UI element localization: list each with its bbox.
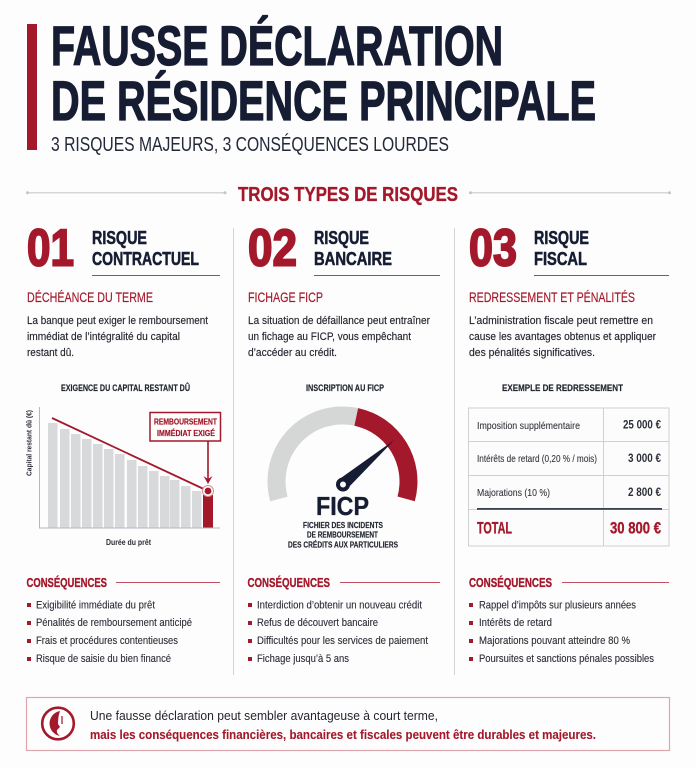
callout text (90, 708, 596, 742)
consequences: Risque de saisie du bien financé (36, 653, 171, 665)
FICP definition: DE REMBOURSEMENT (307, 530, 378, 540)
description: La banque peut exiger le remboursement (27, 315, 208, 327)
description: immédiat de l’intégralité du capital (27, 331, 180, 343)
consequences (26, 575, 220, 665)
consequences: Difficultés pour les services de paiement (257, 635, 428, 647)
heading (534, 227, 669, 276)
column dividers (233, 228, 234, 675)
consequences: Fichage jusqu’à 5 ans (257, 653, 349, 665)
description: La situation de défaillance peut entraîner (248, 315, 430, 327)
description: restant dû. (27, 347, 74, 359)
table: 3 000 € (628, 451, 661, 465)
panel: risque contractuel (24, 220, 220, 665)
FICP label: FICP (316, 493, 369, 521)
table (468, 408, 669, 546)
trend line (52, 418, 208, 491)
description: cause les avantages obtenus et appliquer (469, 331, 656, 343)
consequences: Interdiction d’obtenir un nouveau crédit (257, 600, 422, 612)
header block (27, 14, 596, 156)
table total: TOTAL (477, 520, 512, 538)
number 01: 01 (27, 220, 74, 278)
callout: IMMÉDIAT EXIGÉ (157, 428, 215, 438)
gauge chart (268, 406, 417, 550)
table: 30 800 € (610, 520, 661, 538)
callout: footer warning (26, 698, 670, 750)
description (248, 315, 430, 359)
panel: risque bancaire (248, 220, 440, 665)
title: FAUSSE DÉCLARATION (51, 14, 503, 77)
bar chart: Durée du prêt (106, 538, 151, 547)
subheading: DÉCHÉANCE DU TERME (27, 289, 153, 305)
subheading: FICHAGE FICP (248, 289, 323, 305)
description: d’accéder au crédit. (248, 347, 337, 359)
table: 2 800 € (628, 485, 661, 499)
consequences: CONSÉQUENCES (26, 575, 107, 590)
chart title: INSCRIPTION AU FICP (306, 383, 384, 393)
heading: BANCAIRE (314, 248, 392, 269)
number 03: 03 (469, 220, 517, 278)
heading: RISQUE (314, 227, 369, 248)
description: des pénalités significatives. (469, 347, 595, 359)
section heading (26, 184, 671, 206)
heading: RISQUE (92, 227, 147, 248)
FICP definition: DES CRÉDITS AUX PARTICULIERS (288, 540, 399, 550)
consequences: CONSÉQUENCES (469, 575, 552, 590)
panel: risque fiscal (468, 220, 669, 665)
arrow (204, 441, 212, 484)
consequences (248, 575, 440, 665)
consequences: Intérêts de retard (479, 617, 552, 629)
description: un fichage au FICP, vous empêchant (248, 331, 411, 343)
heading: RISQUE (534, 227, 589, 248)
table rows: Imposition supplémentaire (477, 420, 580, 432)
consequences: CONSÉQUENCES (248, 575, 330, 590)
consequences: Frais et procédures contentieuses (36, 635, 178, 647)
consequences (469, 575, 669, 665)
table: Intérêts de retard (0,20 % / mois) (477, 453, 597, 465)
consequences: Refus de découvert bancaire (257, 617, 378, 629)
description: L’administration fiscale peut remettre en (469, 315, 653, 327)
heading: FISCAL (534, 248, 587, 269)
description (27, 315, 208, 359)
description (469, 315, 656, 359)
consequences: Exigibilité immédiate du prêt (36, 600, 155, 612)
table: 25 000 € (623, 418, 661, 432)
consequences: Poursuites et sanctions pénales possibles (479, 653, 654, 665)
callout text: mais les conséquences financières, bancaires et fiscales peuvent être durables et majeures. (90, 727, 596, 742)
axis labels: Capital restant dû (€) (24, 410, 34, 476)
icon: warning (42, 708, 74, 739)
table title: EXEMPLE DE REDRESSEMENT (502, 383, 623, 393)
subheading: REDRESSEMENT ET PÉNALITÉS (469, 289, 635, 305)
FICP definition: FICHIER DES INCIDENTS (303, 521, 384, 530)
marker (202, 486, 214, 496)
heading (314, 227, 440, 276)
callout (150, 412, 220, 441)
title accent bar (27, 24, 37, 150)
subtitle: 3 RISQUES MAJEURS, 3 CONSÉQUENCES LOURDES (51, 133, 449, 156)
number 02: 02 (248, 220, 297, 278)
bar chart (24, 407, 220, 547)
FICP definition (288, 521, 399, 550)
section heading: TROIS TYPES DE RISQUES (238, 184, 458, 206)
consequences: Pénalités de remboursement anticipé (36, 617, 192, 629)
consequences: Majorations pouvant atteindre 80 % (479, 635, 630, 647)
table: Majorations (10 %) (477, 487, 550, 499)
callout: REMBOURSEMENT (154, 416, 217, 426)
chart title: EXIGENCE DU CAPITAL RESTANT DÛ (61, 382, 190, 393)
heading: CONTRACTUEL (92, 248, 199, 269)
needle (338, 440, 394, 490)
callout text: Une fausse déclaration peut sembler avantageuse à court terme, (90, 708, 438, 723)
consequences: Rappel d’impôts sur plusieurs années (479, 600, 636, 612)
title (51, 14, 596, 132)
heading (92, 227, 220, 276)
